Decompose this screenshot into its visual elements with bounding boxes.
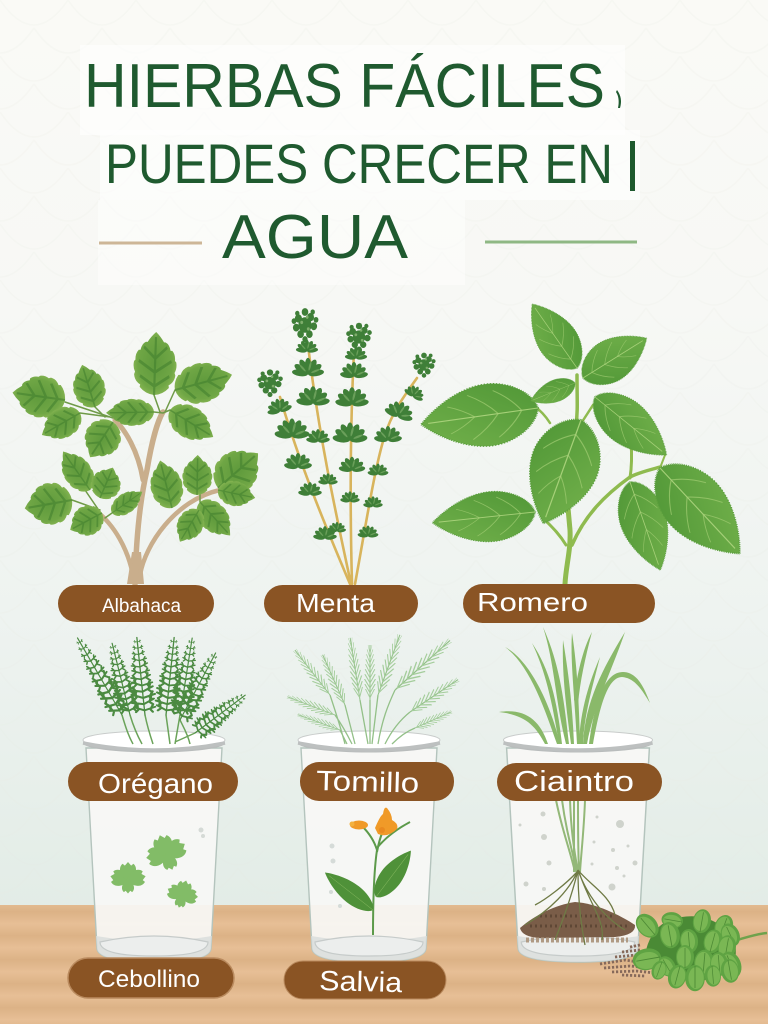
glass: centre with flower [286, 633, 462, 962]
submerged stems [556, 800, 585, 872]
seeds [600, 945, 655, 976]
title divider: tan [99, 242, 202, 244]
label: Cebollino [68, 958, 234, 998]
label: Ciaintro [497, 763, 662, 801]
label: Tomillo [300, 762, 454, 801]
wooden table [0, 905, 768, 1024]
plant: orégano sprigs [68, 632, 252, 744]
floating leaves [109, 828, 205, 912]
title: HIERBAS FÁCILES [84, 52, 605, 121]
plant: romero [417, 293, 762, 584]
label: Albahaca: Albahaca [102, 596, 181, 617]
plant: ciaintro blades [499, 627, 650, 744]
title: PUEDES CRECER EN [105, 132, 613, 195]
title [84, 52, 635, 272]
label: Salvia [284, 961, 446, 999]
bubbles [518, 812, 638, 891]
label: Menta: Menta [296, 588, 376, 618]
title divider: green [485, 240, 637, 244]
label: Orégano: Orégano [98, 768, 213, 799]
flower stem in water [319, 808, 420, 935]
plant: tomillo fronds [286, 633, 462, 744]
herb bunch [631, 908, 767, 991]
plant: menta [257, 308, 436, 584]
label: Orégano [68, 762, 238, 801]
glass: right with roots [499, 627, 653, 962]
label: Tomillo: Tomillo [316, 765, 420, 799]
label: Ciaintro: Ciaintro [514, 766, 634, 798]
glass: left with floating leaves [68, 632, 252, 962]
soil and roots [520, 870, 635, 945]
label: Romero: Romero [477, 587, 588, 617]
label: Romero [463, 584, 655, 623]
label: Albahaca [58, 585, 214, 622]
title: AGUA [222, 203, 409, 272]
label: Cebollino: Cebollino [98, 966, 200, 993]
label: Salvia: Salvia [319, 965, 403, 998]
label: Menta [264, 585, 418, 622]
plant: albahaca [10, 331, 272, 584]
